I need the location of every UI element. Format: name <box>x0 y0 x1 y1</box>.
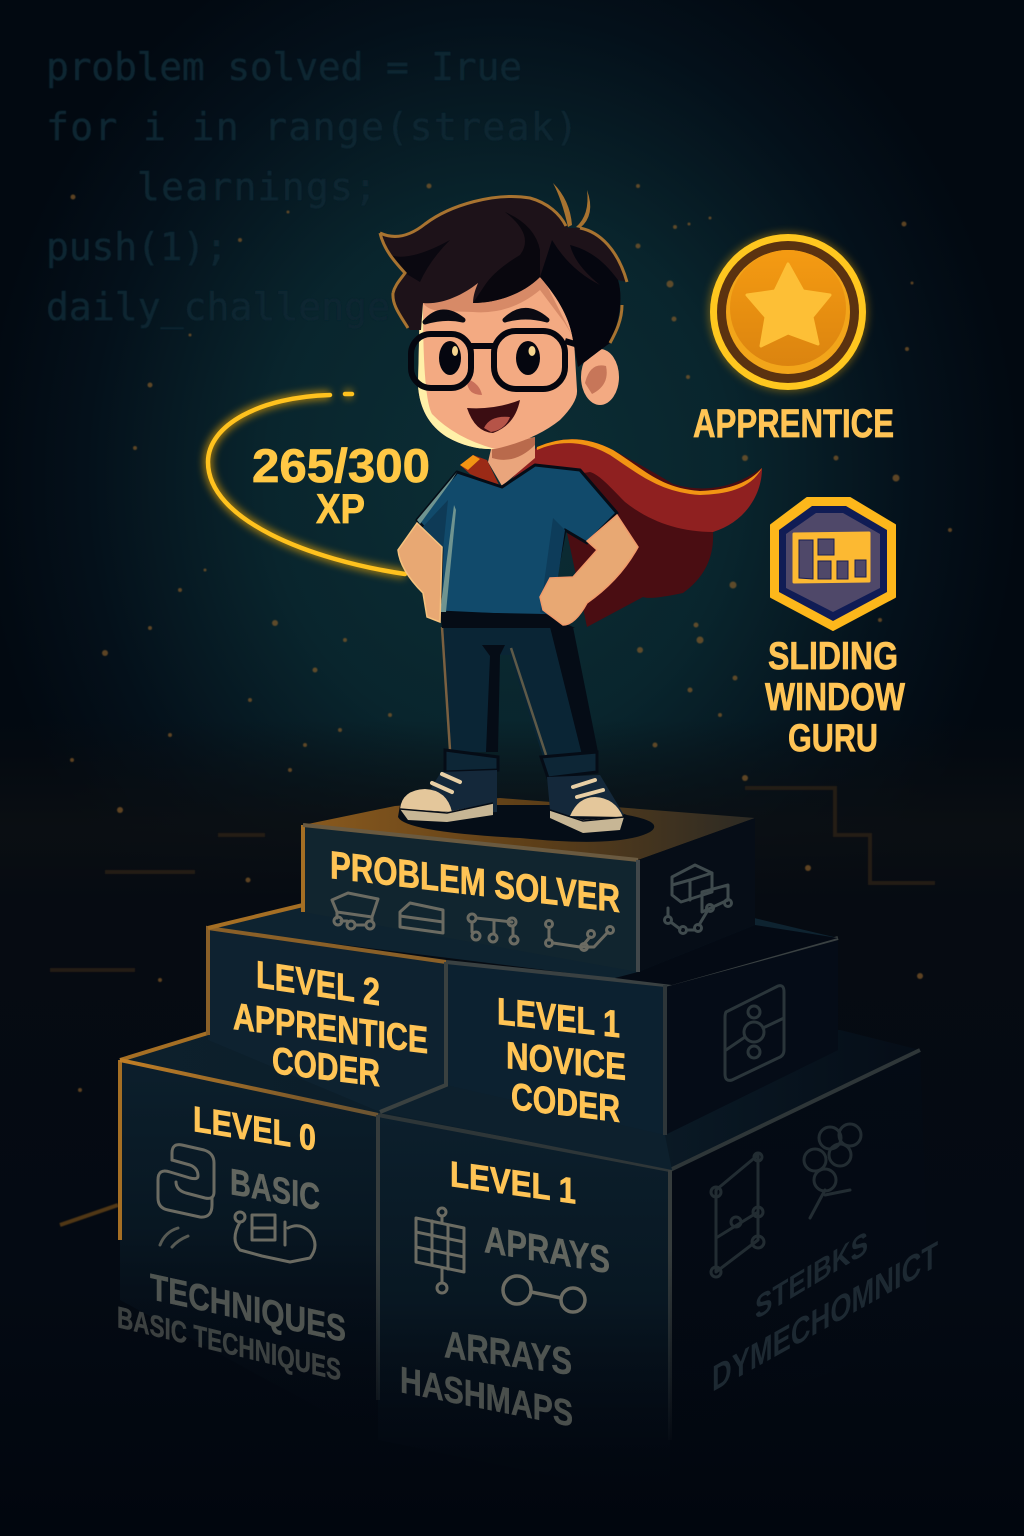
label: apprentice: APPRENTICE <box>693 402 894 446</box>
label: level 1 novice coder <box>497 991 626 1131</box>
label: level 1 novice coder: NOVICE <box>506 1035 626 1089</box>
icon: side of top box <box>664 865 732 934</box>
forehead shadow <box>423 272 572 335</box>
side face label: DYMECHOMNICT <box>712 1234 938 1400</box>
label: sliding window guru: SLIDING <box>768 635 898 678</box>
side face label: STEIBKS <box>755 1225 868 1327</box>
background code text: problem solved = Irue <box>46 45 522 89</box>
podium <box>120 798 930 1500</box>
label: problem solver: PROBLEM SOLVER <box>330 844 620 921</box>
progress ring: XP <box>208 394 405 574</box>
left shoe <box>400 770 497 822</box>
icons: side face <box>711 1124 861 1277</box>
label: level 0 column: LEVEL 0 <box>193 1098 316 1159</box>
ear <box>581 349 619 405</box>
label: level 1 novice coder: CODER <box>511 1075 620 1131</box>
label: level 0 column: TECHNIQUES <box>150 1265 346 1350</box>
cape <box>460 439 762 627</box>
background code text: for i in range(streak) <box>46 105 578 149</box>
neck <box>488 437 535 486</box>
tier 1 top box <box>303 798 838 985</box>
tier 2 <box>208 905 838 1170</box>
face highlight <box>418 305 495 449</box>
right arm <box>540 515 638 625</box>
label: level 0 column: BASIC <box>230 1160 320 1218</box>
background code text: daily_challenge <box>46 285 390 330</box>
eyes <box>439 341 540 375</box>
icons: problem solver row <box>332 893 614 950</box>
level 1 column: HASHMAPS <box>400 1358 573 1435</box>
left arm <box>398 523 442 622</box>
icons: array grid and nodes <box>416 1208 585 1312</box>
label: level 2 apprentice coder <box>233 953 428 1095</box>
shoe shadow <box>398 805 654 842</box>
icon: side of tier 2 <box>725 986 784 1080</box>
label: sliding window guru: WINDOW <box>765 676 905 719</box>
level 1 column: ARRAYS <box>444 1323 572 1384</box>
badge: apprentice <box>708 232 868 392</box>
label: level 2 apprentice coder: CODER <box>272 1039 380 1095</box>
side face label <box>712 1225 938 1400</box>
hair <box>380 183 627 367</box>
label: XP counter: XP <box>316 485 365 532</box>
nose <box>467 380 482 395</box>
label: level 0 column: BASIC TECHNIQUES <box>117 1300 341 1388</box>
label: XP counter <box>252 439 430 532</box>
icons: python and path <box>158 1145 315 1262</box>
badge: sliding window <box>771 498 895 630</box>
eyebrows <box>425 310 547 322</box>
right shoe <box>547 775 624 833</box>
level 1 column: LEVEL 1 <box>450 1153 576 1212</box>
label: level 0 column <box>117 1098 346 1388</box>
label: level 2 apprentice coder: APPRENTICE <box>233 995 428 1062</box>
label: sliding window guru <box>765 635 905 760</box>
label: XP counter: 265/300 <box>252 439 430 492</box>
background code text: learnings; <box>137 165 377 209</box>
mouth <box>467 400 520 433</box>
level 1 column: APRAYS <box>484 1218 610 1282</box>
shirt <box>417 465 617 628</box>
background staircase outlines <box>50 788 935 1225</box>
level 1 column <box>400 1153 610 1435</box>
background code text: push(1); <box>46 225 228 269</box>
background star dots <box>70 184 952 1092</box>
glasses <box>411 331 575 389</box>
label: level 1 novice coder: LEVEL 1 <box>497 991 620 1047</box>
label: level 2 apprentice coder: LEVEL 2 <box>256 953 380 1015</box>
character <box>380 183 762 842</box>
tier 3 base <box>120 1030 930 1500</box>
label: sliding window guru: GURU <box>788 717 878 760</box>
background code text <box>46 45 578 330</box>
face <box>418 265 577 449</box>
legs <box>442 625 598 778</box>
